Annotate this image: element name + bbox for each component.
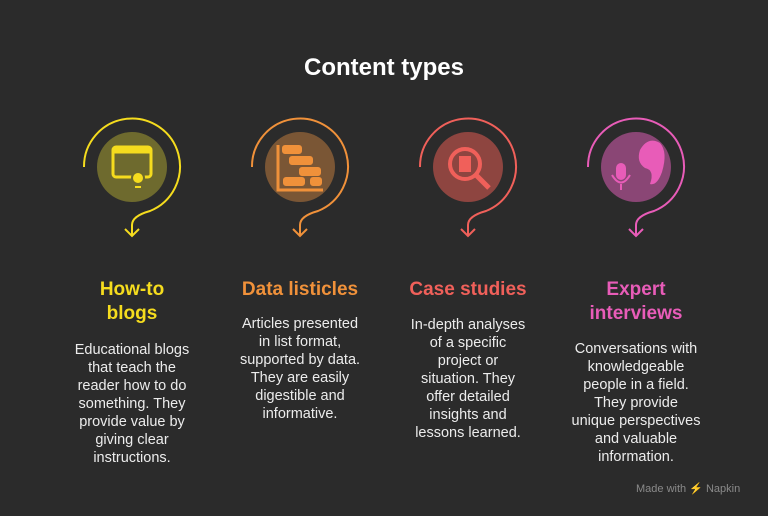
text: unique perspectives [572,413,700,429]
text: knowledgeable [588,359,684,375]
icon: case studies [420,119,516,236]
text: Educational blogs [75,342,189,358]
text: informative. [263,406,337,422]
text: and valuable [595,431,677,447]
heading: Expert [606,279,666,300]
text: giving clear [95,432,169,448]
icon: data listicles [252,119,348,236]
text: supported by data. [240,352,360,368]
text [411,317,525,441]
icons graphic [83,118,686,238]
text: provide value by [79,414,185,430]
footer credit: Made with ⚡ Napkin [636,483,740,495]
text: digestible and [255,388,345,404]
text: of a specific [430,335,506,351]
text: Conversations with [575,341,697,357]
heading: blogs [107,303,157,324]
text: in list format, [259,334,341,350]
text: reader how to do [78,378,186,394]
text: offer detailed [426,389,510,405]
text [75,342,189,466]
text: They are easily [251,370,349,386]
heading: Data listicles [242,279,358,300]
heading: How-to [100,279,164,300]
icon: expert interviews [588,119,684,236]
icon: how-to blogs [84,119,180,236]
text: situation. They [421,371,515,387]
heading: interviews [590,303,682,324]
column: data listicles [240,279,360,422]
text: people in a field. [583,377,689,393]
text [572,341,700,465]
text: lessons learned. [415,425,521,441]
text: something. They [79,396,185,412]
text [240,316,360,422]
text: insights and [429,407,507,423]
text: information. [598,449,674,465]
text: that teach the [88,360,176,376]
column: expert interviews [572,279,700,465]
heading: Case studies [409,279,527,300]
text: They provide [594,395,678,411]
text: In-depth analyses [411,317,525,333]
text: instructions. [93,450,171,466]
title: Content types [304,54,464,81]
text: Articles presented [242,316,358,332]
column: how-to blogs [75,279,189,466]
heading [590,279,682,324]
column: case studies [409,279,527,441]
text: project or [438,353,498,369]
heading [100,279,164,324]
